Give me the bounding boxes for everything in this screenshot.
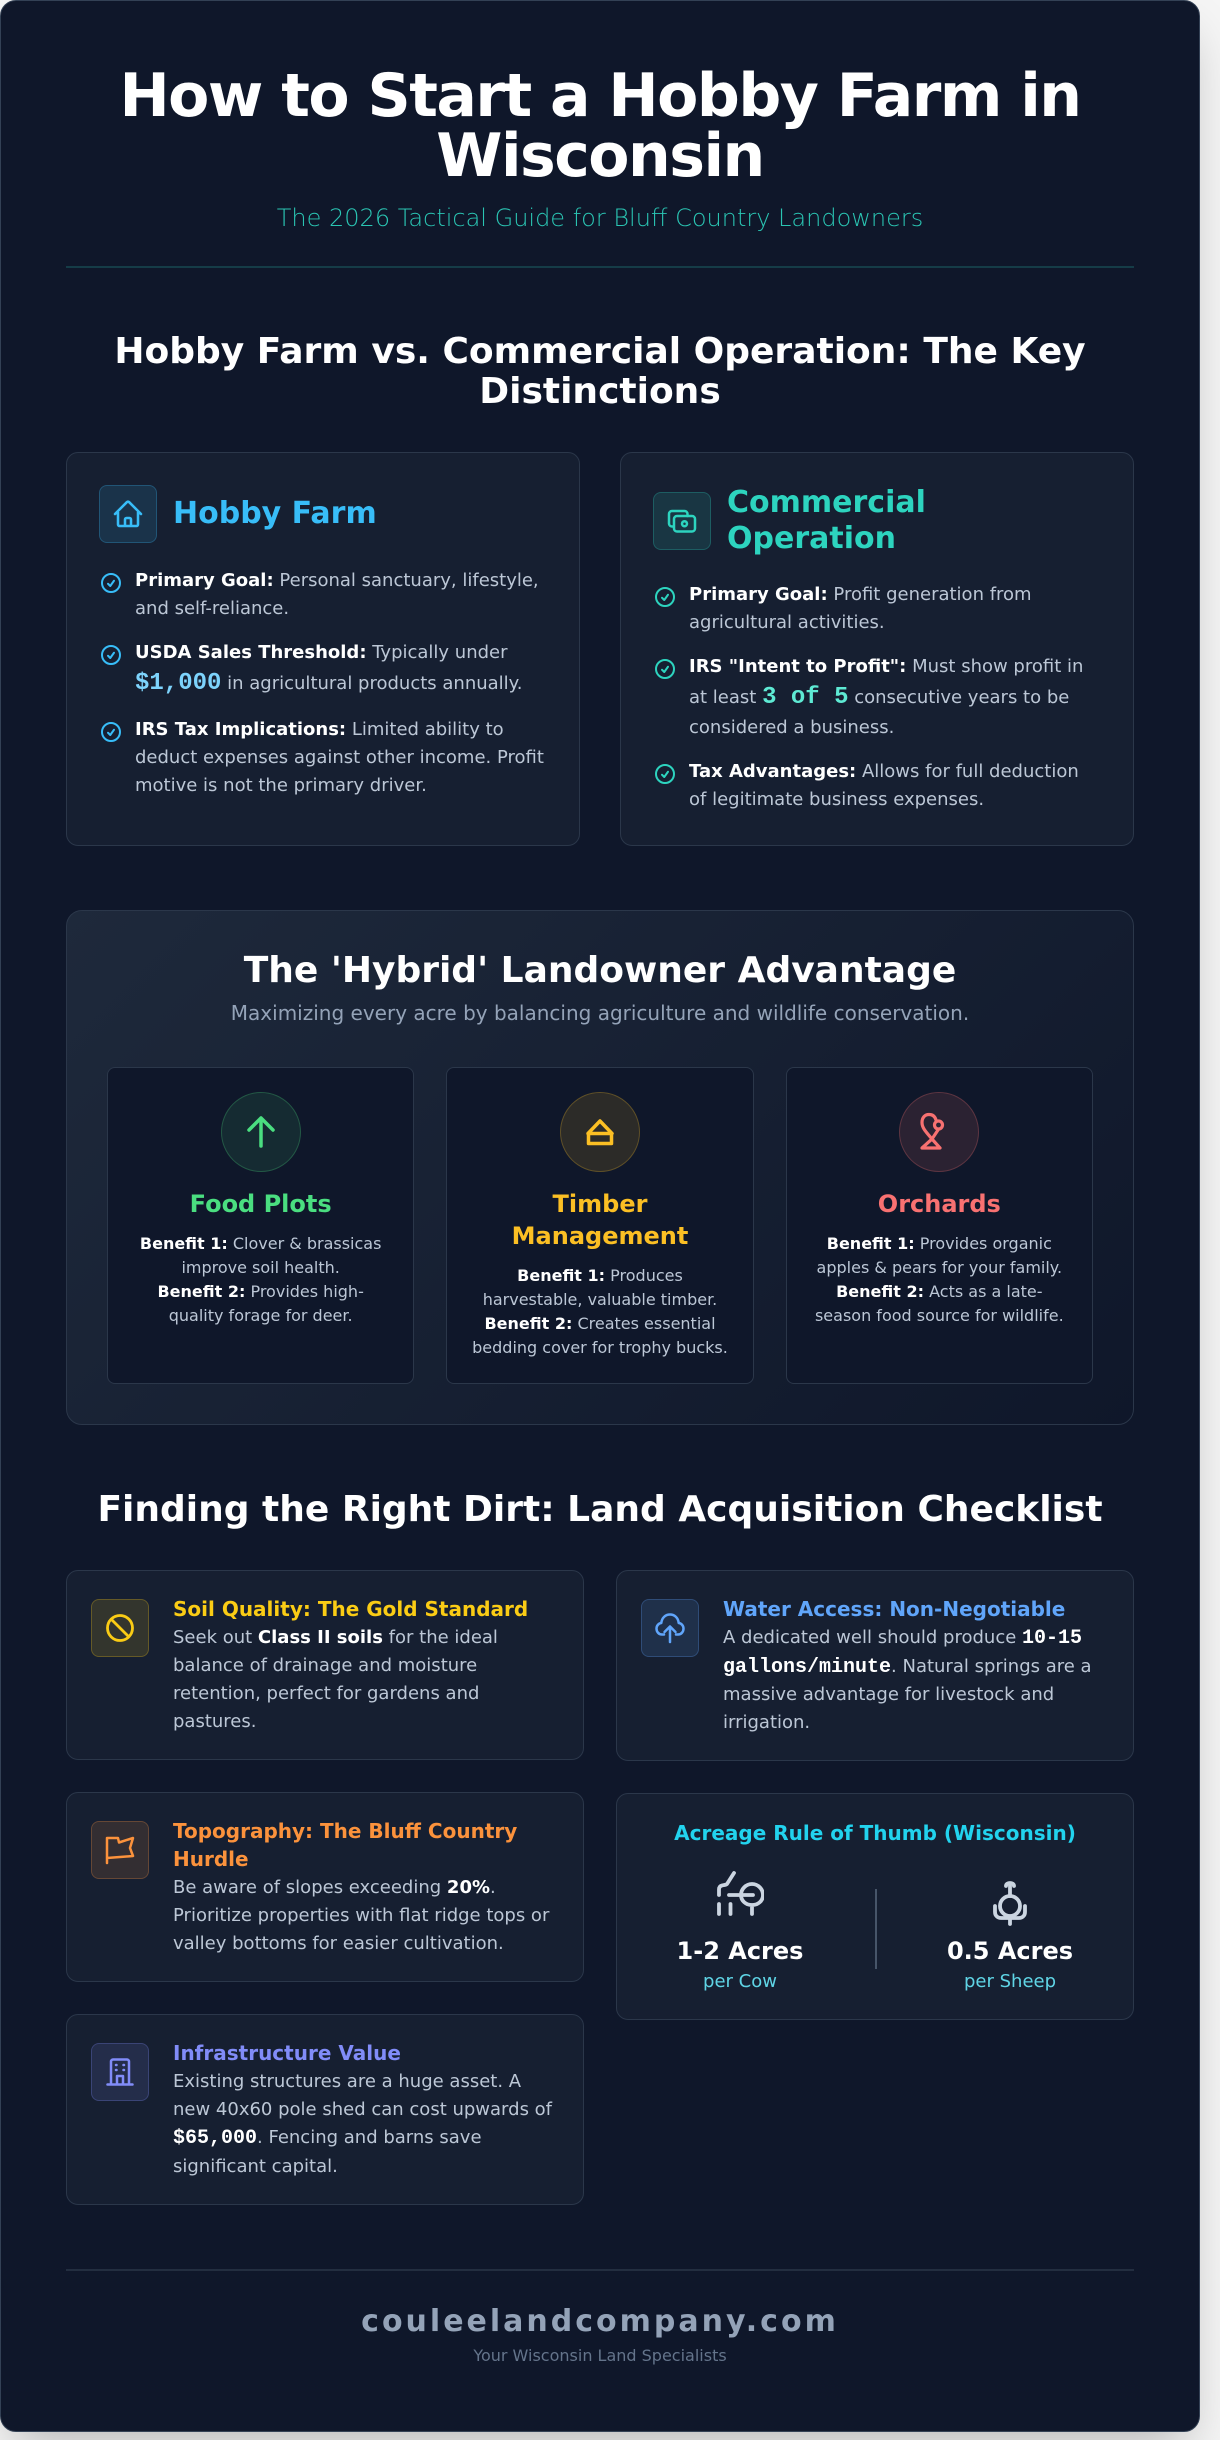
card: food plots: Benefit 2: Provides high-quality forage for deer. — [157, 1282, 364, 1325]
hybrid heading: The 'Hybrid' Landowner Advantage — [244, 950, 956, 991]
panel: topography — [66, 1792, 584, 1982]
hobby farm facts: IRS Tax Implications: Limited ability to deduct expenses against other income. Profit motive is not the primary driver. — [135, 719, 544, 796]
icon: sheep — [993, 1881, 1027, 1926]
infrastructure text: Existing structures are a huge asset. A new 40x60 pole shed can cost upwards of $65,000. Fencing and barns save significant capital. — [173, 2071, 552, 2176]
icon: arrow up — [221, 1092, 301, 1172]
stat: 1-2 acres per cow — [677, 1937, 803, 1992]
hobby farm header — [99, 485, 377, 543]
icon: building — [91, 2043, 149, 2101]
hobby farm header: Hobby Farm — [173, 496, 377, 531]
card: timber management — [446, 1067, 754, 1384]
card: timber management: Timber — [553, 1190, 647, 1218]
panel: soil quality — [66, 1570, 584, 1760]
commercial operation header: Commercial — [727, 485, 926, 520]
heading: land acquisition checklist: Finding the Right Dirt: Land Acquisition Checklist — [97, 1489, 1103, 1530]
stat: 1-2 acres per cow: 1-2 Acres — [677, 1937, 803, 1965]
footer tagline: Your Wisconsin Land Specialists — [473, 2346, 727, 2365]
card: timber management: Management — [512, 1222, 688, 1250]
card: food plots: Food Plots — [190, 1190, 332, 1218]
icon: cloud upload — [641, 1599, 699, 1657]
panel: acreage rule of thumb — [616, 1793, 1134, 2020]
topography text: Be aware of slopes exceeding 20%. Prioritize properties with flat ridge tops or valley bottoms for easier cultivation. — [173, 1877, 549, 1954]
icon: prohibited circle — [91, 1599, 149, 1657]
divider — [875, 1889, 877, 1969]
card: food plots: Benefit 1: Clover & brassicas improve soil health. — [140, 1234, 381, 1277]
hobby farm facts: Primary Goal: Personal sanctuary, lifestyle, and self-reliance. — [135, 570, 539, 619]
panel: water access — [616, 1570, 1134, 1761]
infrastructure text: Infrastructure Value — [173, 2041, 401, 2065]
water access text: A dedicated well should produce 10-15 gallons/minute. Natural springs are a massive advantage for livestock and irrigation. — [723, 1627, 1092, 1733]
panel: hybrid landowner advantage — [66, 910, 1134, 1425]
card: orchards: Benefit 2: Acts as a late-season food source for wildlife. — [815, 1282, 1064, 1325]
commercial operation facts — [655, 584, 1083, 810]
topography text: Topography: The Bluff Country Hurdle — [173, 1819, 517, 1871]
stat: 0.5 acres per sheep: 0.5 Acres — [947, 1937, 1073, 1965]
panel: hobby farm — [66, 452, 580, 846]
soil quality text: Soil Quality: The Gold Standard — [173, 1597, 528, 1621]
card: orchards — [786, 1067, 1093, 1384]
card: orchards: Benefit 1: Provides organic apples & pears for your family. — [817, 1234, 1062, 1277]
hybrid subheading: Maximizing every acre by balancing agriculture and wildlife conservation. — [231, 1001, 969, 1025]
stat: 1-2 acres per cow: per Cow — [703, 1971, 777, 1992]
acreage heading: Acreage Rule of Thumb (Wisconsin) — [674, 1821, 1076, 1845]
title: How to Start a Hobby Farm in Wisconsin — [119, 61, 1081, 191]
commercial operation header: Operation — [727, 521, 896, 556]
icon: timber house — [560, 1092, 640, 1172]
footer brand: couleelandcompany.com — [361, 2304, 839, 2339]
hobby farm facts — [101, 570, 544, 796]
hobby farm facts: USDA Sales Threshold: Typically under $1,000 in agricultural products annually. — [135, 642, 522, 697]
commercial operation facts: Primary Goal: Profit generation from agricultural activities. — [689, 584, 1032, 633]
card: timber management: Benefit 1: Produces harvestable, valuable timber. — [483, 1266, 717, 1309]
commercial operation facts: Tax Advantages: Allows for full deduction of legitimate business expenses. — [689, 761, 1079, 810]
icon: flag — [91, 1821, 149, 1879]
heading: hobby vs commercial: Hobby Farm vs. Commercial Operation: The Key Distinctions — [114, 331, 1086, 412]
icon: cow — [717, 1871, 764, 1916]
stat: 0.5 acres per sheep — [947, 1937, 1073, 1992]
icon: house — [99, 485, 157, 543]
card: food plots — [107, 1067, 414, 1384]
water access text: Water Access: Non-Negotiable — [723, 1597, 1065, 1621]
card: timber management: Benefit 2: Creates essential bedding cover for trophy bucks. — [472, 1314, 728, 1357]
stat: 0.5 acres per sheep: per Sheep — [964, 1971, 1056, 1992]
panel: infrastructure value — [66, 2014, 584, 2205]
card: orchards: Orchards — [878, 1190, 1001, 1218]
commercial operation facts: IRS "Intent to Profit": Must show profit in at least 3 of 5 consecutive years to be considered a business. — [689, 656, 1083, 738]
subtitle: The 2026 Tactical Guide for Bluff Country Landowners — [277, 204, 923, 232]
commercial operation header — [653, 485, 926, 556]
panel: commercial operation — [620, 452, 1134, 846]
icon: banknotes — [653, 492, 711, 550]
topography text — [173, 1819, 550, 1954]
icon: orchard — [899, 1092, 979, 1172]
soil quality text: Seek out Class II soils for the ideal balance of drainage and moisture retention, perfect for gardens and pastures. — [173, 1627, 498, 1732]
